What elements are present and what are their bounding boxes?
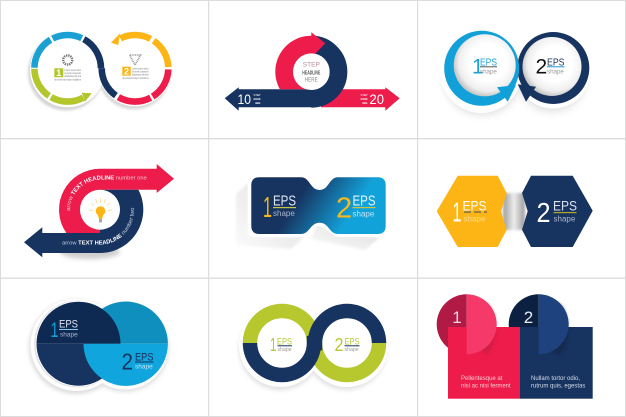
lime left upper half xyxy=(250,311,314,343)
blue circle xyxy=(444,31,519,106)
panel: gradient double tab xyxy=(236,174,389,250)
step 2 label: Lorem ipsum dolor xyxy=(132,66,149,70)
label 2 EPS: EPS xyxy=(135,351,154,363)
circle 2 dark half xyxy=(509,294,539,354)
text block two: rutrum quis, egestas xyxy=(531,384,585,390)
red arrow xyxy=(59,164,174,233)
right lower half xyxy=(84,344,168,386)
panel: S-shaped arrows with bulb xyxy=(24,164,174,261)
label 1 EPS: 1 xyxy=(50,319,58,342)
label 2 EPS: EPS xyxy=(344,336,360,348)
navy circle xyxy=(36,302,120,344)
left ring segments xyxy=(34,35,101,102)
label 10 xyxy=(238,91,261,107)
right ring segments xyxy=(102,35,168,102)
right upper half xyxy=(84,302,168,344)
navy arrow xyxy=(24,190,143,257)
navy arrow head xyxy=(518,84,536,102)
red rectangle xyxy=(448,327,520,399)
label 2 EPS xyxy=(536,56,565,78)
label 2 EPS: 2 xyxy=(536,56,547,78)
step 2 label: do eiusmod tempor incididunt xyxy=(122,76,149,80)
icon: light bulb xyxy=(89,198,112,222)
icon: fan xyxy=(130,55,140,65)
label 2 EPS xyxy=(536,197,577,228)
blue arrow head xyxy=(497,85,516,102)
white center circle xyxy=(80,190,120,230)
white backing and shadow xyxy=(440,32,590,115)
label 20 xyxy=(360,91,384,107)
navy rectangle xyxy=(520,327,593,399)
number 1: 1 xyxy=(452,308,462,327)
text block one: Pellentesque at xyxy=(461,376,503,382)
panel: two circles with curved arrows xyxy=(440,31,590,115)
ring shadows xyxy=(28,32,172,110)
panel: infinity ring xyxy=(239,304,388,390)
label 10: HERE xyxy=(255,101,261,105)
curved text one xyxy=(70,180,150,211)
label 20: HERE xyxy=(362,101,368,105)
text block one: nisl ac nisi ferment xyxy=(461,384,511,390)
label 20: 20 xyxy=(370,91,384,107)
text block two xyxy=(531,376,585,390)
label 10: 10 xyxy=(238,91,251,107)
label 2 EPS: EPS xyxy=(553,198,577,214)
label 1 EPS xyxy=(452,196,487,228)
label 1 EPS xyxy=(50,318,78,342)
label 1 EPS: EPS xyxy=(462,198,486,214)
label 1 EPS xyxy=(270,334,292,355)
label: navy arrow text: arrow TEXT HEADLINE number two xyxy=(62,208,134,244)
navy ring half xyxy=(311,44,338,99)
stacked shadows xyxy=(29,299,169,394)
label 1 EPS: 1 xyxy=(270,334,276,355)
label 1 EPS: EPS xyxy=(273,194,296,210)
label 1 EPS xyxy=(472,56,497,78)
circle 2 light half xyxy=(539,294,569,354)
label 2 EPS: shape xyxy=(344,347,359,353)
center circle xyxy=(293,53,330,90)
step 1 label: 1 xyxy=(56,68,61,78)
shadow and backing xyxy=(239,304,388,390)
label 2 EPS: EPS xyxy=(352,194,376,210)
step 1 label xyxy=(54,68,81,82)
label 2 EPS: 2 xyxy=(122,349,133,375)
panel: two hexagons xyxy=(437,176,593,247)
arrow heads xyxy=(82,33,120,102)
panel: loop with double arrow: HEADLINE xyxy=(254,97,261,101)
navy S band xyxy=(250,311,379,375)
label 1 EPS: shape xyxy=(464,214,486,224)
panel: half circles over rectangles xyxy=(437,294,593,399)
long shadows xyxy=(236,183,380,250)
label 1 EPS: EPS xyxy=(480,58,497,68)
label 1 EPS: EPS xyxy=(277,336,292,348)
soft shadow xyxy=(60,245,120,259)
label 1 EPS: shape xyxy=(480,68,497,76)
red right arrow xyxy=(321,87,400,111)
center headline xyxy=(302,62,321,84)
label 1 EPS xyxy=(263,192,296,224)
label 2 EPS: 2 xyxy=(536,197,550,228)
panel: segmented infinity rings xyxy=(28,32,172,110)
label 2 EPS: 2 xyxy=(336,192,352,224)
step 1 label: sit amet consectet xyxy=(64,71,81,75)
circle 1 dark half xyxy=(437,294,467,354)
white border xyxy=(248,174,389,237)
panel: loop with double arrow xyxy=(225,32,400,111)
right sphere xyxy=(522,37,582,96)
navy lower half xyxy=(36,344,120,386)
label 1 EPS: shape xyxy=(60,331,78,338)
shadow between hexagons xyxy=(503,193,525,230)
step 2 label: adipiscing elit sed xyxy=(132,72,149,76)
step 1 label: adipiscing elit sed xyxy=(64,74,81,78)
label 1 EPS: 1 xyxy=(263,192,272,224)
red ring half with arrow xyxy=(275,32,325,89)
label 2 EPS: shape xyxy=(547,68,564,76)
navy circle xyxy=(517,32,589,104)
number 2: 2 xyxy=(524,308,533,327)
center headline: HEADLINE xyxy=(302,70,321,76)
center headline: STEP xyxy=(303,62,320,68)
gradient shape xyxy=(251,177,386,234)
label 2 EPS xyxy=(122,349,154,375)
label 1 EPS: shape xyxy=(273,209,295,218)
label 1 EPS: 1 xyxy=(452,196,462,228)
circle 1 light half xyxy=(467,294,497,354)
navy hexagon xyxy=(522,176,593,247)
text block one xyxy=(461,376,511,390)
label 2 EPS: shape xyxy=(135,364,153,371)
lime right lower half xyxy=(315,343,379,375)
circle shadows xyxy=(477,304,567,354)
center headline: HERE xyxy=(305,78,318,84)
step 1 label: Lorem ipsum dolor xyxy=(64,68,81,72)
label 2 EPS: shape xyxy=(554,214,576,224)
label 1 EPS: EPS xyxy=(59,318,78,330)
label 20: HEADLINE xyxy=(360,97,368,101)
panel: overlapping half circles xyxy=(29,299,169,394)
label 10: STEP xyxy=(254,93,261,97)
step 1 label: do eiusmod tempor incididunt xyxy=(54,78,81,82)
label 1 EPS: 1 xyxy=(472,56,484,78)
step 2 label xyxy=(122,66,149,80)
icon: gear xyxy=(63,55,72,65)
step 2 label: 2 xyxy=(124,66,129,76)
navy left arrow xyxy=(225,87,312,111)
text block two: Nullam tortor odio, xyxy=(531,376,580,382)
step 2 label: sit amet consectet xyxy=(132,70,149,74)
label 2 EPS xyxy=(336,192,376,224)
label 1 EPS: shape xyxy=(278,347,292,353)
yellow hexagon xyxy=(437,176,507,247)
label 2 EPS: shape xyxy=(352,210,375,218)
left sphere xyxy=(454,34,516,96)
label 20: STEP xyxy=(360,93,368,97)
label 2 EPS: EPS xyxy=(547,58,565,68)
label 2 EPS xyxy=(334,334,360,355)
label: red arrow text: arrow TEXT HEADLINE number one xyxy=(66,176,147,211)
label 2 EPS: 2 xyxy=(334,334,344,355)
curved text two xyxy=(62,208,134,245)
